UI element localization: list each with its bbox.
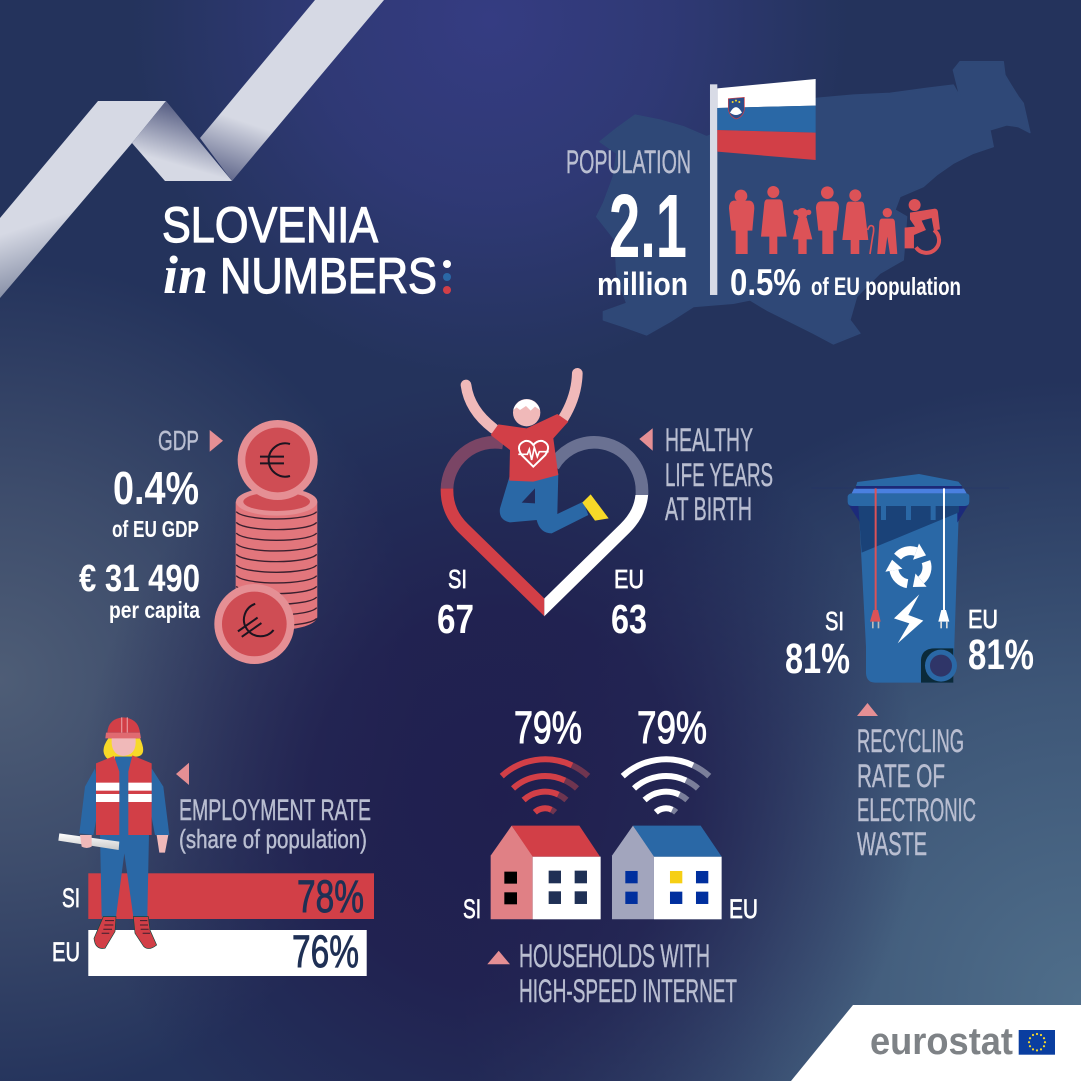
panel: population: [566, 62, 1030, 344]
value: SI 81%: [785, 606, 850, 683]
icon: recycle: [882, 544, 937, 593]
people icons: [729, 186, 940, 254]
label: employment rate: [176, 763, 371, 854]
value: EU 63: 63: [611, 596, 647, 642]
panel: healthy life years: [437, 373, 773, 642]
eurostat logo: eurostat: [870, 1021, 1013, 1063]
houses and wifi: [491, 759, 722, 919]
value: SI 67: SI: [448, 564, 467, 594]
recycling bin: [812, 474, 1009, 683]
value: share of EU population: 0.5%: [730, 262, 801, 303]
label: households with high-speed internet: [487, 938, 737, 1009]
value: EU 81%: [968, 604, 1034, 679]
icon: SI house: [491, 826, 601, 919]
value: SI 81%: SI: [825, 606, 844, 636]
bar: EU: [88, 930, 367, 976]
value: per capita: [79, 558, 200, 623]
label: recycling rate: [857, 703, 976, 862]
label: employment rate: EMPLOYMENT RATE: [179, 794, 371, 827]
icon: EU flag: [1019, 1030, 1055, 1055]
panel: GDP: [79, 420, 318, 664]
value: share of EU GDP: 0.4%: [113, 462, 199, 514]
label: recycling rate: WASTE: [857, 826, 927, 862]
value: SI 78%: 78%: [297, 871, 364, 922]
coin: top: [238, 420, 318, 500]
bar: SI: [88, 873, 374, 919]
title: [162, 197, 451, 305]
title: NUMBERS: [220, 248, 437, 304]
icon: SI wifi: [502, 759, 588, 812]
heart and jumping figure: [447, 373, 642, 619]
value: SI 79%: 79%: [514, 702, 582, 753]
label: recycling rate: RATE OF: [857, 758, 945, 794]
panel: recycling of electronic waste: [785, 474, 1034, 862]
value: EU 63: EU: [614, 564, 644, 594]
value: 2.1 million: million: [597, 266, 688, 302]
cable: EU: [938, 488, 949, 628]
title: SLOVENIA: [162, 197, 379, 253]
label: SI: SI: [463, 894, 481, 924]
cable: SI: [870, 488, 881, 628]
value: 2.1 million: [597, 177, 688, 302]
label: recycling rate: ELECTRONIC: [857, 792, 976, 828]
value: 2.1 million: 2.1: [609, 177, 687, 277]
icon: lightning bolt: [894, 594, 923, 643]
value: share of EU GDP: of EU GDP: [112, 516, 199, 542]
value: EU 81%: 81%: [968, 631, 1034, 679]
value: per capita: € 31 490: [79, 558, 200, 600]
label: recycling rate: RECYCLING: [857, 723, 964, 759]
value: SI 67: 67: [437, 596, 474, 642]
label: healthy life years: LIFE YEARS: [665, 457, 773, 493]
value: SI 81%: 81%: [785, 635, 850, 683]
value: SI 67: [437, 564, 474, 642]
value: share of EU GDP: [112, 462, 199, 542]
label: healthy life years: AT BIRTH: [665, 491, 752, 527]
label: GDP: GDP: [158, 425, 199, 456]
coin: front: [214, 584, 294, 664]
label: EU: EU: [729, 894, 758, 924]
value: EU 79%: 79%: [637, 702, 707, 753]
label: healthy life years: HEALTHY: [665, 422, 753, 458]
value: share of EU population: of EU population: [811, 273, 961, 301]
label: employment rate: (share of population): [179, 824, 367, 854]
value: EU 81%: EU: [968, 604, 998, 634]
label: EU: EU: [52, 937, 80, 967]
eurostat logo: [791, 1005, 1081, 1081]
map of Slovenia: [597, 62, 1030, 344]
worker figure: [58, 717, 169, 949]
label: population: POPULATION: [566, 144, 691, 180]
panel: employment rate: [52, 717, 374, 977]
panel: households with high-speed internet: [463, 702, 758, 1009]
label: households with high-speed internet: HIGH-SPEED INTERNET: [519, 973, 737, 1009]
coin stack: [214, 420, 318, 664]
value: EU 63: [611, 564, 647, 642]
label: healthy life years: [639, 422, 773, 527]
title: in: [163, 245, 208, 305]
value: EU 76%: 76%: [292, 926, 359, 977]
label: SI: SI: [62, 883, 80, 913]
icon: EU wifi: [623, 759, 709, 812]
ribbon: [0, 0, 384, 298]
icon: EU house: [612, 826, 722, 919]
flag: [710, 79, 816, 295]
value: per capita: per capita: [109, 597, 200, 623]
value: share of EU population: [730, 262, 961, 303]
label: households with high-speed internet: HOUSEHOLDS WITH: [519, 938, 710, 974]
